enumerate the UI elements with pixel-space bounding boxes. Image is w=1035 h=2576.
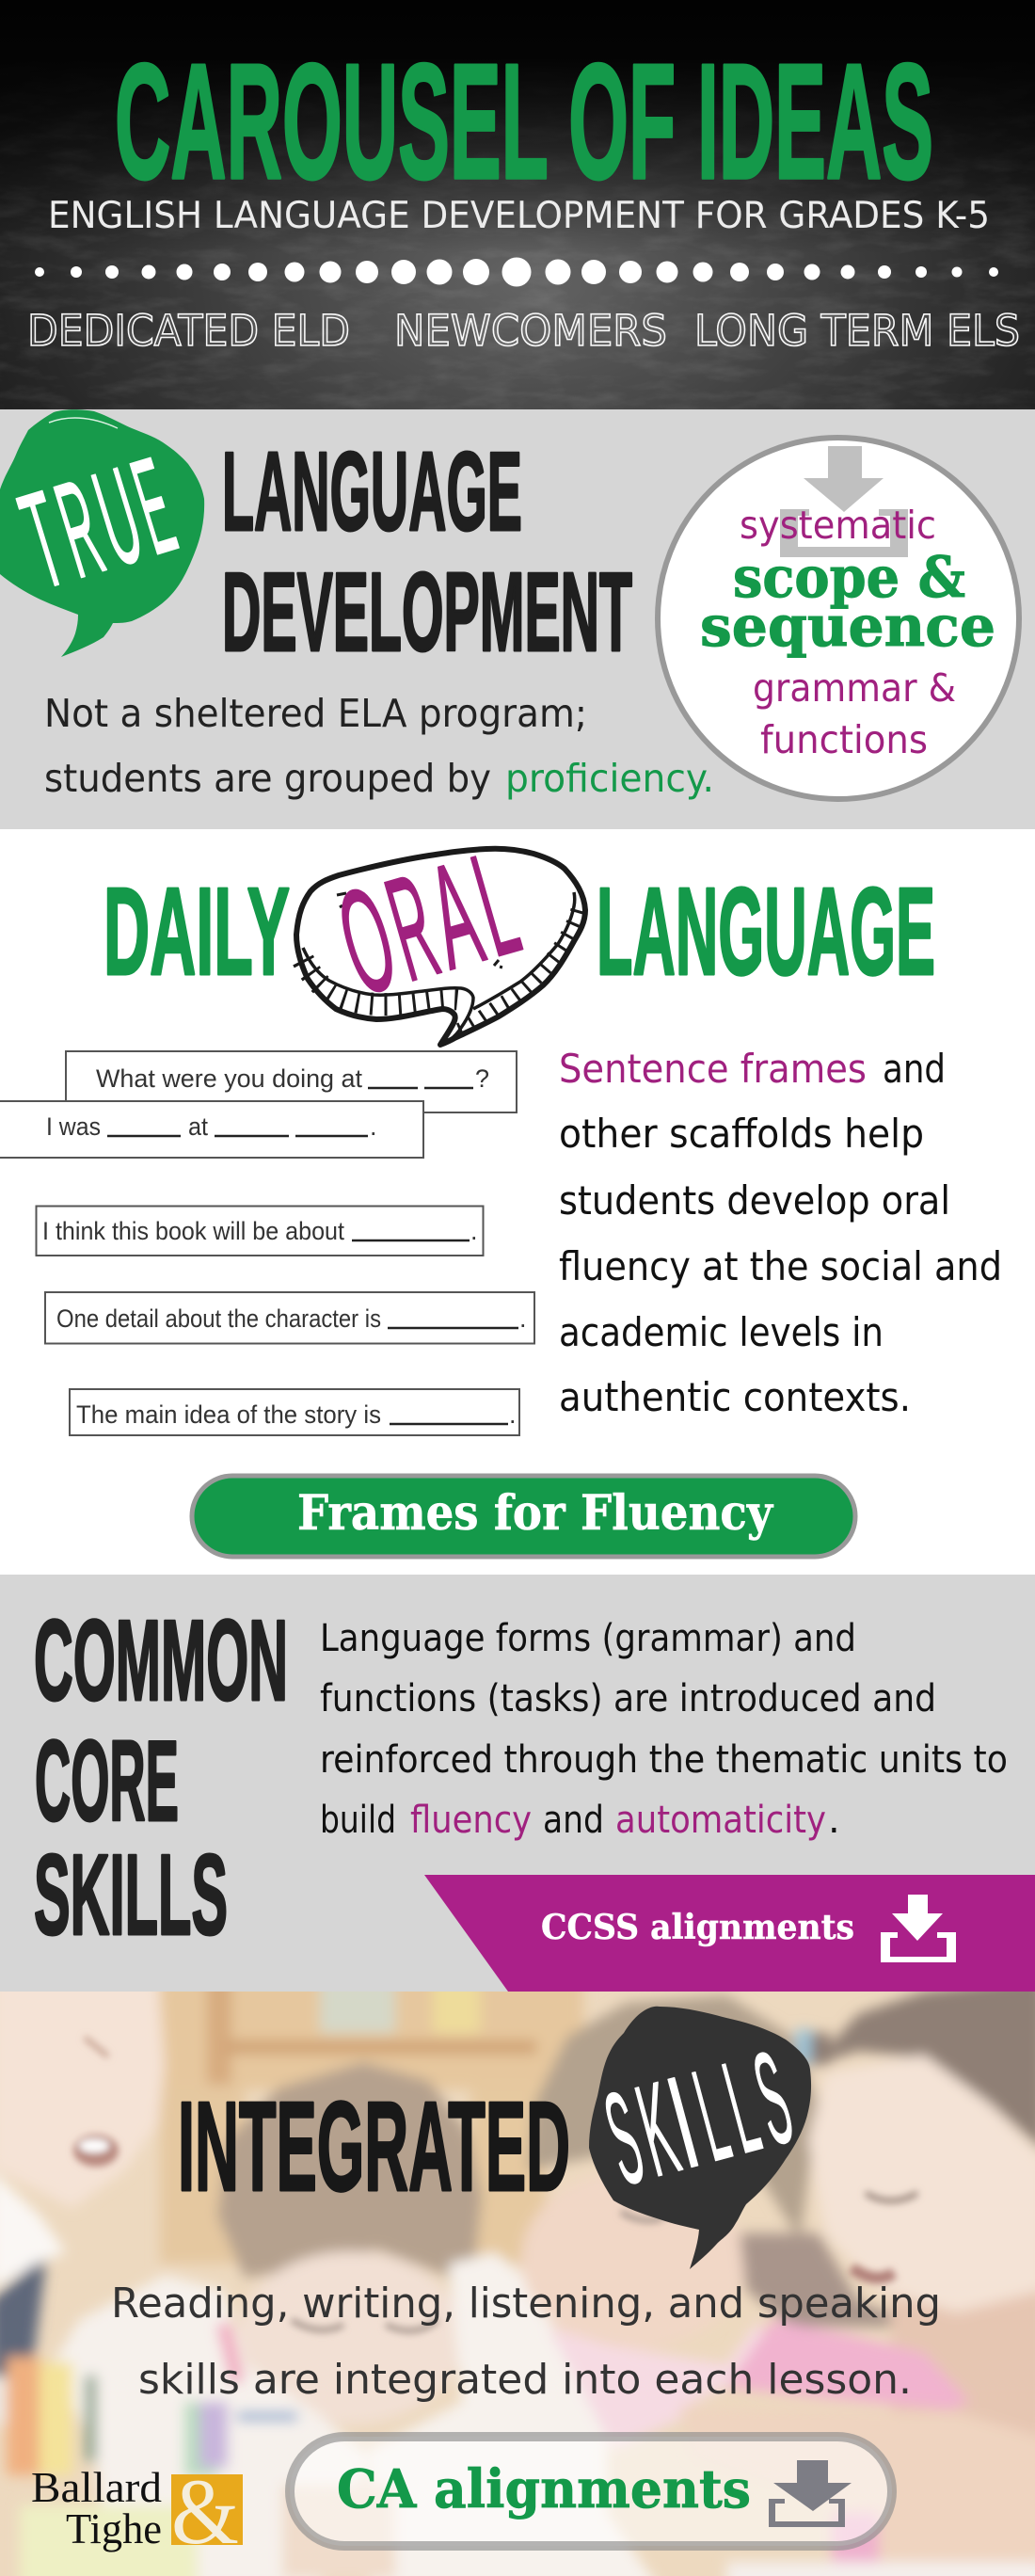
heading: SKILLS bbox=[34, 1831, 228, 1959]
heading: LANGUAGE bbox=[222, 429, 522, 554]
sentence frame: I was: at bbox=[188, 1112, 208, 1141]
panel: common core skills bbox=[0, 1575, 1035, 1992]
sentence frame: what were you doing: What were you doing at bbox=[96, 1064, 362, 1093]
panel: daily oral language bbox=[0, 821, 1035, 1575]
background photo: children reading bbox=[0, 1976, 1035, 2576]
panel: chalkboard header bbox=[0, 0, 1035, 409]
sentence frame: book bbox=[36, 1207, 484, 1256]
sentence frame: character bbox=[45, 1292, 534, 1344]
program labels: LONG TERM ELS bbox=[694, 306, 1020, 356]
heading: CORE bbox=[35, 1717, 179, 1845]
sentence frame: character: . bbox=[519, 1304, 527, 1333]
body text: fluency at the social and bbox=[559, 1243, 1002, 1289]
speech bubble: oral: O bbox=[323, 856, 412, 1027]
body text: authentic contexts. bbox=[559, 1374, 911, 1420]
body text bbox=[559, 1046, 1002, 1420]
panel: integrated skills bbox=[0, 1976, 1035, 2576]
body text: academic levels in bbox=[559, 1309, 884, 1355]
scope and sequence circle bbox=[658, 438, 1019, 799]
body text: build bbox=[320, 1799, 396, 1842]
body text: automaticity bbox=[615, 1799, 826, 1842]
program labels: NEWCOMERS bbox=[394, 306, 667, 356]
program labels bbox=[27, 306, 1020, 356]
button: frames for fluency: Frames for Fluency bbox=[297, 1485, 773, 1542]
icon: download bbox=[769, 2460, 852, 2527]
icon: download bbox=[780, 446, 908, 557]
speech bubble: true bbox=[0, 409, 204, 657]
speech bubble: oral: R bbox=[372, 844, 454, 1013]
button: ca alignments bbox=[290, 2437, 892, 2546]
body text: Language forms (grammar) and bbox=[320, 1617, 856, 1660]
sentence frame: book: I think this book will be about bbox=[42, 1217, 344, 1245]
panel: integrated skills: INTEGRATED bbox=[178, 2075, 570, 2217]
body text: proficiency. bbox=[505, 756, 714, 801]
sentence frame: main idea bbox=[70, 1389, 519, 1435]
program labels: DEDICATED ELD bbox=[27, 306, 350, 356]
speech bubble: skills: S bbox=[741, 2024, 804, 2173]
heading bbox=[104, 862, 935, 1000]
banner: ccss alignments: CCSS alignments bbox=[541, 1908, 854, 1947]
sentence frame: book: . bbox=[470, 1217, 478, 1245]
sentence frame: I was bbox=[0, 1101, 423, 1158]
scope and sequence circle: sequence bbox=[700, 594, 995, 660]
speech bubble: skills: L bbox=[681, 2040, 742, 2189]
heading bbox=[222, 429, 632, 675]
subtitle: ENGLISH LANGUAGE DEVELOPMENT FOR GRADES K-5 bbox=[48, 195, 990, 237]
body text: Not a sheltered ELA program; bbox=[44, 691, 587, 736]
speech bubble: oral: A bbox=[413, 831, 497, 1000]
icon: download bbox=[881, 1895, 956, 1962]
body text: functions (tasks) are introduced and bbox=[320, 1677, 936, 1720]
speech bubble: oral bbox=[296, 821, 585, 1045]
body text: Reading, writing, listening, and speaking bbox=[111, 2280, 941, 2328]
sentence frame: I was: . bbox=[370, 1112, 377, 1141]
speech bubble: skills bbox=[589, 2007, 811, 2269]
body text: . bbox=[828, 1799, 840, 1842]
sentence frame: character: One detail about the character is bbox=[56, 1304, 381, 1333]
button: frames for fluency bbox=[192, 1476, 855, 1557]
scope and sequence circle: functions bbox=[760, 717, 928, 762]
logo: ballard and tighe: Tighe bbox=[66, 2504, 162, 2552]
sentence frame: what were you doing bbox=[66, 1051, 517, 1112]
speech bubble: true: T bbox=[7, 462, 80, 617]
speech bubble: skills: L bbox=[711, 2032, 772, 2181]
panel: true language development bbox=[0, 409, 1035, 829]
body text bbox=[320, 1617, 1008, 1842]
sentence frame: main idea: The main idea of the story is bbox=[76, 1400, 381, 1429]
logo: ballard and tighe: Ballard bbox=[31, 2463, 162, 2511]
logo: ballard and tighe: & bbox=[171, 2459, 239, 2564]
heading: DAILY bbox=[104, 862, 290, 1000]
sentence frame: I was: I was bbox=[46, 1112, 101, 1141]
sentence frame: main idea: . bbox=[509, 1400, 517, 1429]
scope and sequence circle: scope & bbox=[733, 545, 965, 611]
banner: ccss alignments bbox=[424, 1875, 1035, 1992]
heading bbox=[34, 1596, 288, 1959]
speech bubble: skills: S bbox=[592, 2063, 656, 2213]
speech bubble: true: E bbox=[118, 429, 189, 583]
button: ca alignments: CA alignments bbox=[337, 2458, 751, 2520]
speech bubble: true: U bbox=[79, 439, 157, 595]
logo: ballard and tighe bbox=[31, 2459, 243, 2564]
body text: and bbox=[883, 1046, 946, 1092]
body text: fluency bbox=[410, 1799, 532, 1842]
speech bubble: true: R bbox=[41, 451, 118, 606]
panel: common core skills: COMMON bbox=[34, 1596, 288, 1724]
speech bubble: skills: I bbox=[654, 2048, 712, 2196]
scope and sequence circle: grammar & bbox=[753, 665, 956, 711]
dotted divider bbox=[35, 258, 998, 286]
body text: students are grouped by bbox=[44, 756, 491, 801]
body text: students develop oral bbox=[559, 1177, 950, 1224]
body text: other scaffolds help bbox=[559, 1111, 924, 1157]
body text: Sentence frames bbox=[559, 1046, 867, 1092]
sentence frame: what were you doing: ? bbox=[475, 1064, 489, 1093]
body text bbox=[111, 2280, 941, 2404]
scope and sequence circle: systematic bbox=[740, 503, 936, 548]
speech bubble: skills: K bbox=[624, 2054, 691, 2204]
body text bbox=[44, 691, 714, 801]
body text: skills are integrated into each lesson. bbox=[138, 2356, 912, 2404]
speech bubble: oral: L bbox=[457, 821, 533, 988]
body text: and bbox=[543, 1799, 604, 1842]
